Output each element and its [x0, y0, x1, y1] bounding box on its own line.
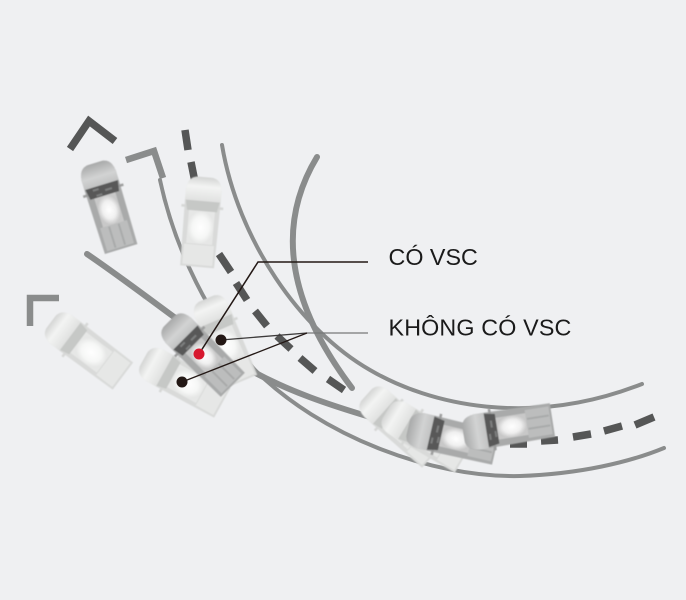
arrow marker: grey corner top	[126, 151, 163, 178]
arrow marker: dark chevron	[70, 121, 115, 149]
car: light left	[38, 305, 136, 393]
leader line: with VSC	[199, 262, 368, 354]
label: with VSC: CÓ VSC	[388, 244, 478, 270]
car: grey right 1	[403, 407, 501, 469]
leader lines: without VSC	[182, 333, 368, 382]
car: light right 1	[353, 379, 447, 471]
trajectory: thick skid curve	[87, 254, 370, 417]
car: grey right 2	[460, 399, 556, 455]
road: thin outer curve top	[222, 145, 642, 408]
car: light centre upper	[187, 290, 261, 390]
car: light centre lower	[133, 341, 233, 421]
label: without VSC: KHÔNG CÓ VSC	[388, 314, 572, 340]
car: grey centre	[154, 306, 248, 400]
car: grey top left	[75, 157, 141, 255]
marker: red dot	[194, 348, 204, 360]
car: light top	[176, 175, 226, 269]
marker: black dot upper	[216, 334, 226, 346]
dashed centre line	[185, 130, 654, 444]
car: light right 2	[376, 394, 474, 476]
road: thin curve bottom	[160, 180, 664, 476]
arrow marker: grey corner left	[30, 298, 59, 326]
road: thick inner curve	[293, 157, 352, 388]
marker: black dot lower	[176, 376, 188, 388]
